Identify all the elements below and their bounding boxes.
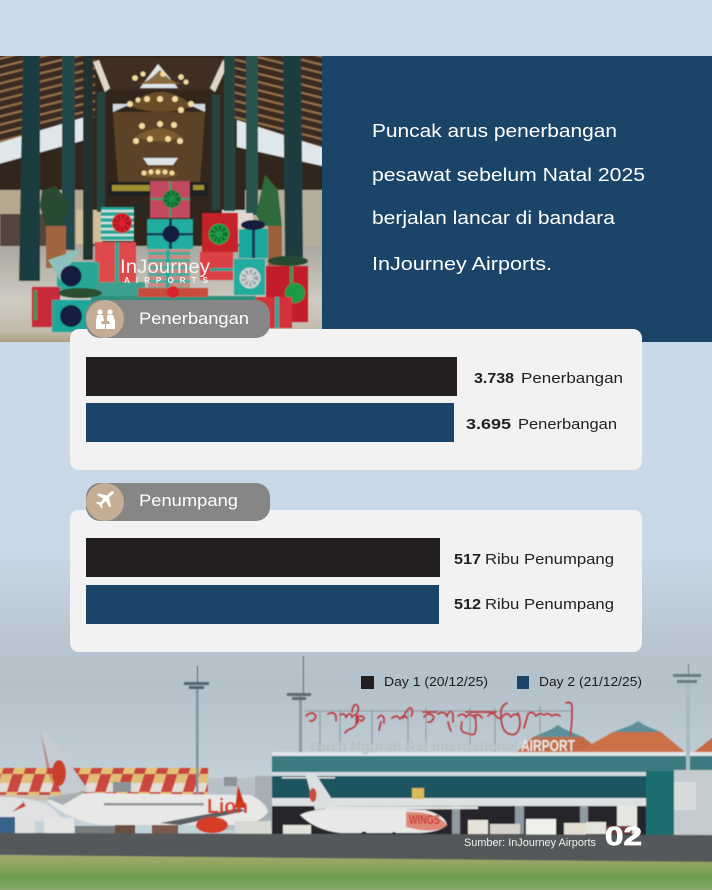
- background plane: [0, 787, 62, 822]
- value label: passengers day 2: 512: [454, 596, 481, 613]
- navy text panel: [322, 56, 712, 342]
- gift row: [32, 181, 308, 332]
- legend item: day 2: Day 2 (21/12/25): [539, 674, 642, 689]
- pillars: [19, 50, 303, 281]
- floodlight tower centre: [287, 656, 311, 756]
- icon: seated passengers: [86, 300, 124, 338]
- chandeliers: [127, 70, 194, 178]
- Lion Air jet: [41, 732, 271, 836]
- value label: flights day 1: Penerbangan: [521, 370, 623, 387]
- top photo: gifts in terminal: [0, 50, 327, 346]
- panel: flights chart: [70, 329, 642, 470]
- value label: passengers day 1: 517: [454, 551, 481, 568]
- intro text: InJourney Airports.: [372, 253, 552, 274]
- page number: 02: [605, 821, 642, 851]
- plants: [40, 186, 70, 228]
- building with chequered roof: [0, 768, 274, 830]
- intro text: [372, 120, 645, 274]
- bar: flights day 1: [86, 357, 457, 396]
- InJourney Airports logo on gifts: [122, 260, 210, 283]
- legend: [361, 674, 642, 689]
- legend item: day 1: Day 1 (20/12/25): [384, 674, 488, 689]
- intro text: berjalan lancar di bandara: [372, 207, 616, 228]
- departures boards: [108, 182, 208, 196]
- airport photo backdrop: [0, 656, 712, 890]
- floodlight tower left: [184, 666, 209, 794]
- apron asphalt: [0, 833, 712, 863]
- intro text: pesawat sebelum Natal 2025: [372, 164, 645, 185]
- bar: flights day 2: [86, 403, 454, 442]
- Wings Air plane: [282, 772, 478, 838]
- gift boxes stack: [32, 181, 308, 332]
- value label: passengers day 2: Ribu Penumpang: [485, 596, 614, 613]
- terminal white sign letters: Gusti Ngurah Rai International: [310, 738, 518, 754]
- label: Penerbangan: [139, 310, 249, 328]
- grass: [0, 855, 712, 890]
- icon: airplane: [86, 483, 124, 521]
- InJourney Airports logo on gifts: InJourney: [120, 257, 211, 278]
- script signboard red lettering decoration: [306, 702, 572, 735]
- Lion Air jet: Lion: [207, 796, 248, 818]
- bar: passengers day 2: [86, 585, 439, 624]
- Wings Air plane: WINGS: [409, 812, 440, 827]
- value label: flights day 1: 3.738: [474, 370, 514, 387]
- value label: flights day 2: [466, 416, 617, 433]
- signboard frame: [305, 706, 572, 752]
- label: Penumpang: [139, 492, 238, 510]
- heading pill: Penumpang: [86, 483, 270, 521]
- ground service vehicles left: [0, 817, 311, 836]
- floodlight tower right: [673, 664, 701, 770]
- heading pill: Penerbangan: [86, 300, 270, 338]
- value label: flights day 2: 3.695: [466, 416, 511, 433]
- panel: passengers chart: [70, 510, 642, 652]
- ground service vehicles right: [468, 819, 632, 836]
- InJourney Airports logo on gifts: AIRPORTS: [124, 276, 209, 285]
- intro text: Puncak arus penerbangan: [372, 120, 617, 141]
- terminal roof domes: [516, 721, 712, 753]
- hall interior: [0, 50, 327, 346]
- bar: passengers day 1: [86, 538, 440, 577]
- value label: flights day 2: Penerbangan: [518, 416, 617, 433]
- terminal building: [272, 752, 712, 835]
- terminal white sign letters: AIRPORT: [521, 738, 575, 755]
- value label: passengers day 1: Ribu Penumpang: [485, 551, 614, 568]
- source note: Sumber: InJourney Airports: [464, 837, 596, 849]
- value label: flights day 1: [474, 370, 623, 387]
